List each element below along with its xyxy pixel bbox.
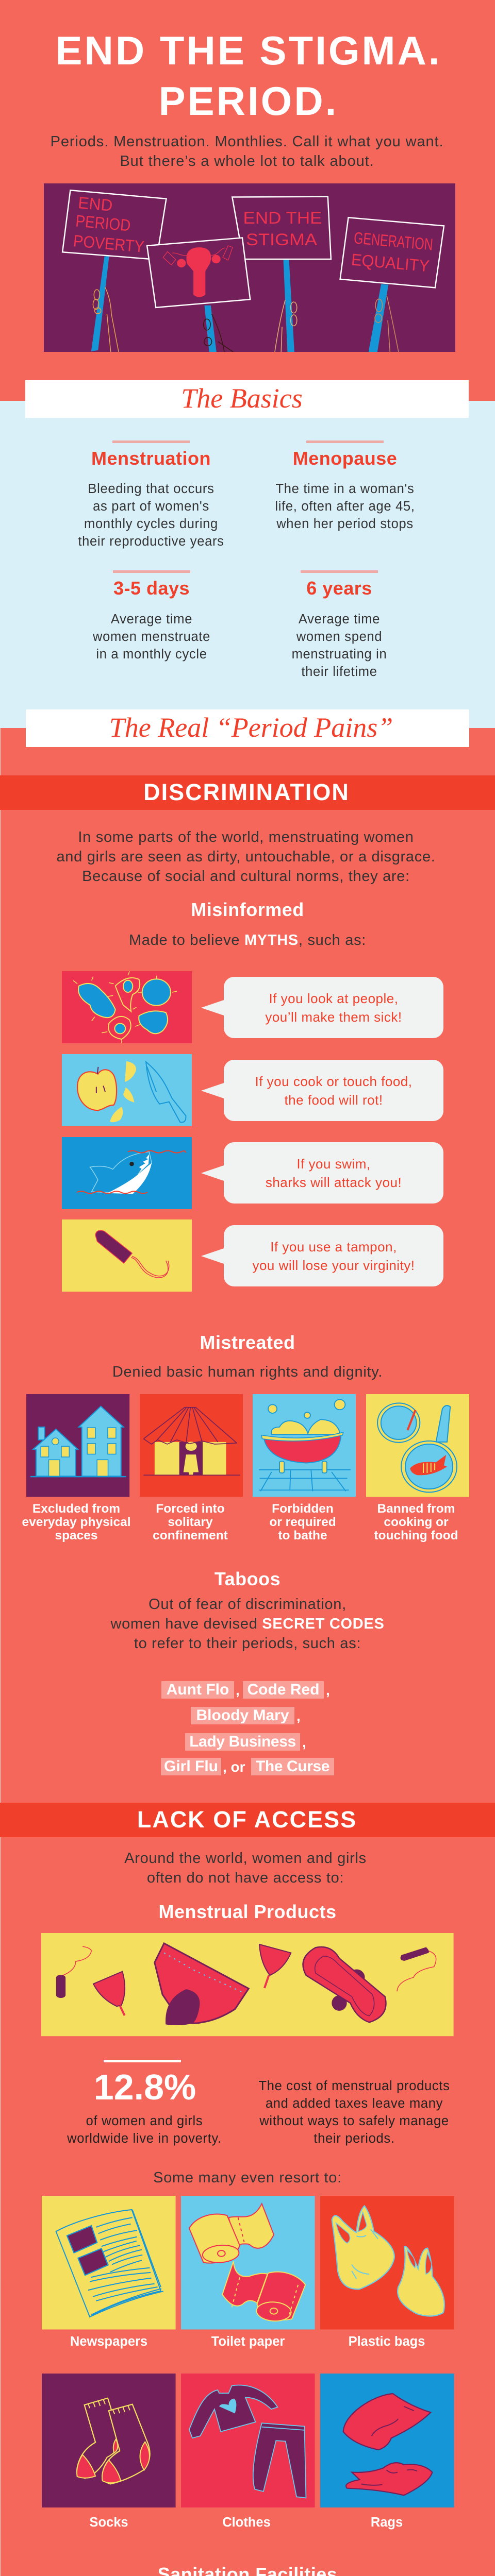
- stat text: lifetime menstruation: Average time: [299, 612, 380, 626]
- divider: 6 years: [301, 570, 378, 573]
- stat text: poverty: [67, 2114, 222, 2146]
- divider: menstruation: [112, 440, 190, 443]
- sign lettering: [73, 193, 434, 276]
- comma: ,: [302, 1734, 306, 1750]
- section band: Lack of Access: LACK OF ACCESS: [137, 1806, 357, 1833]
- subtitle: Periods. Menstruation. Monthlies. Call it what you want.: [51, 133, 443, 150]
- heading: Misinformed: Misinformed: [191, 899, 304, 920]
- icon: newspaper: [42, 2196, 176, 2330]
- title: [55, 28, 442, 124]
- stat text: menstruation length: [93, 612, 210, 662]
- definition: menstruation: their reproductive years: [78, 534, 224, 549]
- heading: Mistreated: Mistreated: [200, 1332, 295, 1353]
- speech bubble: tampon: you will lose your virginity!: [252, 1257, 415, 1273]
- comma: ,: [296, 1708, 301, 1724]
- icon: germs: [62, 971, 192, 1043]
- section background: basics light blue: [0, 401, 495, 728]
- label: excluded: Excluded from: [32, 1502, 120, 1516]
- definition: menopause: when her period stops: [276, 517, 414, 531]
- label: plastic bags: Plastic bags: [349, 2334, 425, 2349]
- icon: toilet paper: [181, 2196, 315, 2330]
- text: cost of products: their periods.: [314, 2131, 395, 2146]
- stat: 12.8%: 12.8%: [94, 2067, 196, 2107]
- icon: rags: [320, 2374, 454, 2507]
- subtitle: But there’s a whole lot to talk about.: [120, 153, 374, 170]
- label: excluded: spaces: [55, 1529, 98, 1543]
- section band: Discrimination: DISCRIMINATION: [143, 779, 350, 805]
- icon: shark: [62, 1137, 192, 1209]
- text: cost of products: [258, 2079, 450, 2146]
- heading: The Basics: The Basics: [181, 383, 303, 414]
- speech bubble: cook or touch food: If you cook or touch food,: [255, 1074, 412, 1089]
- label: confinement: [153, 1502, 228, 1543]
- comma: ,: [326, 1682, 330, 1698]
- code word: Girl Flu: Girl Flu: [164, 1758, 218, 1775]
- sign lettering: PERIOD: [75, 211, 131, 235]
- hero illustration: protest signs: [44, 183, 455, 352]
- intro: lack of access: [124, 1850, 367, 1886]
- heading: Menstrual Products: Menstrual Products: [158, 1901, 337, 1922]
- stat text: poverty: of women and girls: [86, 2114, 203, 2128]
- speech bubble: cook or touch food: [224, 1060, 443, 1121]
- label: rags: Rags: [371, 2515, 403, 2530]
- definition: menstruation: monthly cycles during: [84, 517, 218, 531]
- icon: pot and pan: [366, 1394, 469, 1497]
- sign lettering: EQUALITY: [351, 250, 430, 276]
- section band: Discrimination: [0, 775, 495, 810]
- heading: The Basics: [25, 380, 469, 418]
- icon: houses: [26, 1394, 130, 1497]
- label: cooking: cooking or: [384, 1515, 449, 1529]
- label: bathe: to bathe: [278, 1529, 327, 1543]
- text: secret codes intro: Out of fear of discrimination,: [148, 1596, 346, 1613]
- icon: hut: [140, 1394, 243, 1497]
- subtitle: [51, 133, 443, 170]
- definition: menstruation: Bleeding that occurs: [88, 482, 214, 496]
- label: cooking: touching food: [374, 1529, 458, 1543]
- label: confinement: confinement: [153, 1529, 228, 1543]
- sign lettering: STIGMA: [246, 230, 318, 249]
- sign: generation equality: [340, 217, 444, 287]
- speech bubble: look at people: If you look at people,: [269, 990, 398, 1006]
- icon: apple and knife: [62, 1054, 192, 1126]
- code word: The Curse: The Curse: [256, 1758, 329, 1775]
- sign lettering: POVERTY: [73, 231, 145, 256]
- text: secret codes intro: women have devised SECRET CODES: [110, 1616, 385, 1632]
- text: cost of products: without ways to safely manage: [259, 2114, 449, 2128]
- section band: Lack of Access: [0, 1803, 495, 1837]
- icon: tampon: [62, 1219, 192, 1292]
- label: toilet paper: Toilet paper: [211, 2334, 285, 2349]
- conjunction: or: , or: [223, 1759, 245, 1775]
- speech bubble: tampon: [224, 1225, 443, 1286]
- speech bubble: swim: If you swim,: [296, 1156, 371, 1172]
- heading: The Real Period Pains: The Real “Period Pains”: [109, 712, 393, 743]
- label: confinement: solitary: [168, 1515, 213, 1529]
- label: excluded: everyday physical: [22, 1515, 131, 1529]
- icon: bathtub: [253, 1394, 356, 1497]
- code word: Aunt Flo: Aunt Flo: [167, 1681, 229, 1698]
- illustration: menstrual products: [41, 1933, 454, 2036]
- icon: socks: [42, 2374, 176, 2507]
- speech bubble: swim: [224, 1142, 443, 1204]
- icon: clothes: [181, 2374, 315, 2507]
- sign: end the stigma: [232, 197, 331, 259]
- stat text: lifetime menstruation: women spend: [296, 630, 382, 644]
- divider: 3-5 days: [113, 570, 190, 573]
- intro: discrimination: and girls are seen as dirty, untouchable, or a disgrace.: [56, 849, 436, 865]
- speech bubble: look at people: you’ll make them sick!: [265, 1009, 402, 1024]
- divider: poverty stat: [104, 2060, 181, 2062]
- label: socks: Socks: [89, 2515, 128, 2530]
- text: cost of products: The cost of menstrual products: [258, 2079, 450, 2093]
- label: newspapers: Newspapers: [70, 2334, 147, 2349]
- intro: lack of access: Around the world, women and girls: [124, 1850, 367, 1867]
- intro: lack of access: often do not have access to:: [147, 1870, 344, 1886]
- label: bathe: [269, 1502, 336, 1543]
- text: myths intro: Made to believe MYTHS, such as:: [129, 932, 366, 948]
- code word: Lady Business: Lady Business: [189, 1733, 296, 1750]
- divider: menopause: [306, 440, 384, 443]
- stat text: lifetime menstruation: their lifetime: [301, 665, 377, 679]
- heading: Taboos: Taboos: [214, 1568, 280, 1589]
- comma: ,: [236, 1682, 240, 1698]
- definition: menstruation: [78, 482, 224, 549]
- text: mistreated intro: Denied basic human rights and dignity.: [112, 1364, 383, 1380]
- label: bathe: Forbidden: [272, 1502, 334, 1516]
- label: cooking: Banned from: [377, 1502, 455, 1516]
- label: confinement: Forced into: [156, 1502, 225, 1516]
- speech bubble: swim: sharks will attack you!: [266, 1175, 402, 1190]
- stat text: poverty: worldwide live in poverty.: [67, 2131, 222, 2146]
- label: clothes: Clothes: [222, 2515, 271, 2530]
- heading: Menopause: Menopause: [293, 448, 397, 469]
- heading: The Real Period Pains: [26, 709, 469, 747]
- stat: 3-5 days: 3-5 days: [113, 578, 190, 599]
- title: PERIOD.: [159, 78, 338, 124]
- text: secret codes intro: [110, 1596, 385, 1652]
- sign lettering: END: [77, 193, 113, 215]
- label: bathe: or required: [269, 1515, 336, 1529]
- code word: Bloody Mary: Bloody Mary: [196, 1707, 289, 1724]
- speech bubble: look at people: [224, 977, 443, 1038]
- definition: menstruation: as part of women's: [93, 499, 209, 514]
- label: excluded: [22, 1502, 131, 1543]
- sign handles: [91, 257, 388, 352]
- definition: menopause: [275, 482, 415, 531]
- intro: discrimination: Because of social and cultural norms, they are:: [82, 868, 410, 885]
- sign lettering: END THE: [243, 209, 322, 227]
- label: cooking: [374, 1502, 458, 1543]
- definition: menopause: The time in a woman's: [275, 482, 415, 496]
- stat text: menstruation length: in a monthly cycle: [96, 647, 207, 662]
- hands holding signs: [93, 287, 399, 352]
- intro: discrimination: In some parts of the world, menstruating women: [78, 829, 414, 845]
- definition: menopause: life, often after age 45,: [275, 499, 415, 514]
- stat text: menstruation length: Average time: [111, 612, 192, 626]
- sign: uterus drawing: [147, 238, 250, 308]
- text: cost of products: and added taxes leave many: [266, 2096, 443, 2111]
- stat text: lifetime menstruation: [292, 612, 387, 679]
- code word: Code Red: Code Red: [247, 1681, 320, 1698]
- text: resort intro: Some many even resort to:: [153, 2170, 342, 2186]
- intro: discrimination: [56, 829, 436, 885]
- speech bubble: cook or touch food: the food will rot!: [284, 1092, 383, 1108]
- title: END THE STIGMA.: [55, 28, 442, 73]
- speech bubble: tampon: If you use a tampon,: [270, 1239, 397, 1254]
- stat: 6 years: 6 years: [306, 578, 372, 599]
- heading: Menstruation: Menstruation: [91, 448, 211, 469]
- icon: plastic bags: [320, 2196, 454, 2330]
- sign: end period poverty: [62, 190, 166, 260]
- stat text: lifetime menstruation: menstruating in: [292, 647, 387, 662]
- stat text: menstruation length: women menstruate: [93, 630, 210, 644]
- text: secret codes intro: to refer to their periods, such as:: [134, 1635, 361, 1652]
